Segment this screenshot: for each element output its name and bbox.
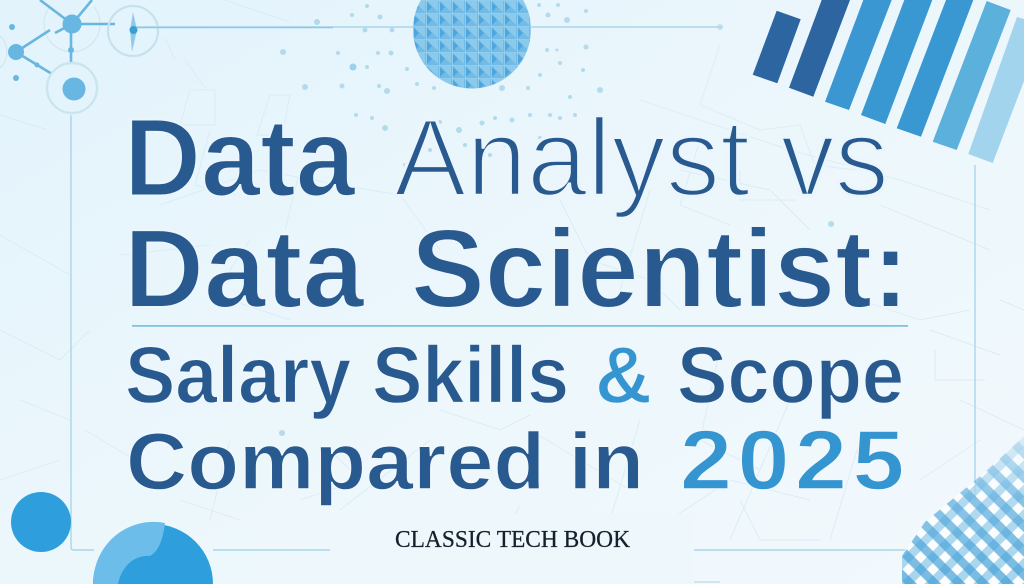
compass icon	[108, 6, 333, 56]
small nodes	[9, 24, 74, 81]
title line 4: Compared in	[126, 417, 644, 507]
title line 3	[125, 330, 904, 420]
target ring	[47, 63, 97, 113]
title line 3: Salary Skills	[125, 330, 569, 420]
title line 2: Data	[124, 207, 365, 331]
title line 2: Scientist:	[411, 207, 909, 331]
patterned circle top	[413, 0, 531, 88]
footer label: CLASSIC TECH BOOK	[395, 527, 631, 553]
title rule	[132, 325, 908, 327]
segmented circle bottom	[93, 522, 213, 584]
title line 4	[126, 413, 910, 507]
gingham pattern corner	[902, 436, 1024, 584]
title line 4: 2025	[680, 413, 910, 507]
title	[124, 96, 910, 507]
title line 1	[124, 96, 889, 220]
striped bars icon	[753, 0, 1024, 163]
title line 3: Scope	[677, 330, 904, 420]
title line 3: &	[595, 330, 652, 420]
node	[8, 44, 24, 60]
title line 2	[124, 207, 909, 331]
solid circle bottom left	[11, 492, 71, 552]
footer plate	[331, 514, 694, 584]
target node	[62, 78, 86, 100]
scattered data dots	[279, 3, 834, 436]
network icon	[0, 0, 115, 113]
node	[62, 14, 82, 34]
title line 1: Data	[124, 96, 356, 220]
title line 1: Analyst vs	[394, 96, 889, 220]
